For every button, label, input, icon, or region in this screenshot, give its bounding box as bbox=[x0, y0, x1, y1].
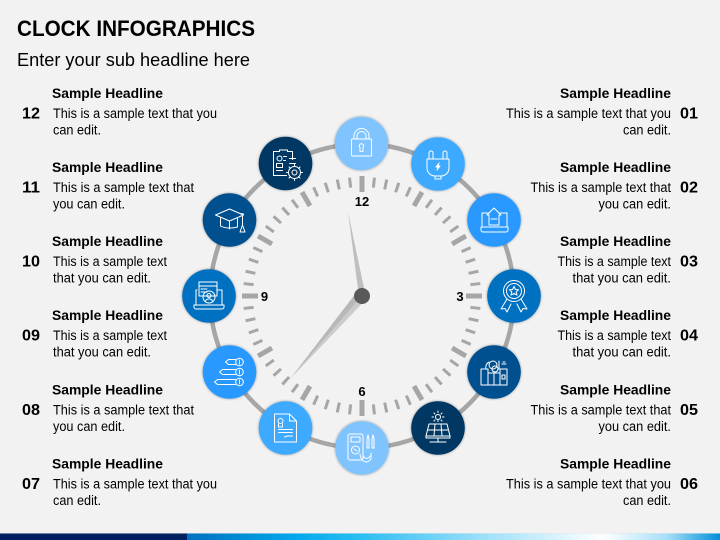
icon node 11: clipboard gear bbox=[259, 137, 312, 190]
text block: 04: 04 bbox=[680, 328, 698, 344]
icon node 8: numbered list arrows bbox=[203, 345, 256, 399]
text block: 08: This is a sample text that bbox=[53, 402, 194, 418]
text block: 02: 02 bbox=[680, 180, 698, 196]
icon node 4: factory bbox=[467, 345, 521, 399]
text block: 10: Sample Headline bbox=[52, 233, 163, 249]
text block: 02: Sample Headline bbox=[560, 159, 671, 175]
text block: 06: This is a sample text that you bbox=[506, 476, 671, 492]
text block: 04 bbox=[558, 307, 698, 360]
icon node 5: solar panel bbox=[411, 401, 465, 455]
clock minor ticks bbox=[244, 178, 480, 414]
icon node 10: graduation cap bbox=[203, 193, 256, 247]
text block: 11: 11 bbox=[22, 180, 40, 196]
icon node 1: plug bbox=[411, 137, 465, 191]
icon node 9: laptop profile bbox=[182, 269, 236, 323]
text block: 01: This is a sample text that you bbox=[506, 106, 671, 121]
text block: 03 bbox=[558, 233, 698, 286]
text block: 11: Sample Headline bbox=[52, 159, 163, 175]
clock numerals: 12 bbox=[355, 194, 369, 209]
text block: 01: Sample Headline bbox=[560, 85, 671, 101]
text block: 09: 09 bbox=[22, 328, 40, 344]
text block: 05: Sample Headline bbox=[560, 382, 671, 398]
text block: 09: Sample Headline bbox=[52, 307, 163, 323]
text block: 12: Sample Headline bbox=[52, 85, 163, 101]
text block: 09: that you can edit. bbox=[53, 344, 151, 360]
clock center bbox=[354, 288, 370, 304]
text block: 06 bbox=[506, 456, 698, 508]
text block: 05: you can edit. bbox=[598, 419, 671, 434]
clock numerals: 6 bbox=[358, 384, 366, 399]
text block: 03: This is a sample text bbox=[558, 254, 671, 269]
text block: 11: This is a sample text that bbox=[53, 180, 194, 195]
clock hour ticks bbox=[242, 176, 482, 416]
text block: 07: Sample Headline bbox=[52, 456, 163, 472]
text block: 05: This is a sample text that bbox=[530, 402, 671, 418]
text block: 12: This is a sample text that you bbox=[53, 106, 217, 121]
text block: 02: you can edit. bbox=[598, 196, 671, 212]
footer bar bbox=[0, 533, 720, 540]
text block: 03: 03 bbox=[680, 254, 698, 270]
clock numerals bbox=[261, 194, 464, 399]
text block: 08: Sample Headline bbox=[52, 382, 163, 398]
icon node 7: document bbox=[259, 401, 312, 455]
text block: 02: This is a sample text that bbox=[530, 180, 671, 195]
clock numerals: 9 bbox=[261, 289, 268, 304]
text block: 04: This is a sample text bbox=[558, 328, 671, 343]
text block: 08 bbox=[22, 382, 194, 434]
hour hand bbox=[290, 291, 366, 379]
text block: 07: This is a sample text that you bbox=[53, 476, 217, 492]
text block: 08: you can edit. bbox=[53, 419, 125, 434]
text block: 07 bbox=[22, 456, 217, 508]
text block: 10: This is a sample text bbox=[53, 254, 167, 269]
text block: 02 bbox=[530, 159, 698, 212]
text block: 11: you can edit. bbox=[53, 196, 125, 212]
text block: 09 bbox=[22, 307, 167, 360]
text block: 01: 01 bbox=[680, 106, 698, 122]
text block: 10: 10 bbox=[22, 254, 40, 270]
icon node 6: multimeter bbox=[335, 421, 389, 475]
clock ring bbox=[210, 144, 514, 448]
text block: 06: can edit. bbox=[623, 493, 671, 508]
title: CLOCK INFOGRAPHICS bbox=[17, 16, 255, 41]
text block: 03: that you can edit. bbox=[572, 270, 671, 286]
icon node 2: laptop upload bbox=[467, 193, 521, 247]
text block: 07: can edit. bbox=[53, 493, 101, 508]
icon node 12: padlock bbox=[335, 117, 388, 170]
text block: 12: 12 bbox=[22, 106, 40, 122]
text block: 10: that you can edit. bbox=[53, 270, 151, 286]
text block: 04: that you can edit. bbox=[572, 344, 671, 360]
text block: 05 bbox=[530, 382, 698, 434]
text block: 01: can edit. bbox=[623, 122, 671, 138]
text block: 07: 07 bbox=[22, 476, 40, 493]
text block: 11 bbox=[22, 159, 194, 212]
text block: 04: Sample Headline bbox=[560, 307, 671, 323]
text block: 12: can edit. bbox=[53, 122, 101, 138]
clock numerals: 3 bbox=[456, 289, 464, 304]
text block: 06: Sample Headline bbox=[560, 456, 671, 472]
subtitle: Enter your sub headline here bbox=[17, 50, 250, 70]
text block: 12 bbox=[22, 85, 217, 138]
minute hand bbox=[348, 212, 364, 289]
text block: 09: This is a sample text bbox=[53, 328, 167, 343]
text block: 08: 08 bbox=[22, 402, 40, 419]
text block: 01 bbox=[506, 85, 698, 138]
text block: 06: 06 bbox=[680, 476, 698, 493]
text block: 05: 05 bbox=[680, 402, 698, 419]
icon node 3: award ribbon bbox=[487, 269, 541, 323]
text block: 10 bbox=[22, 233, 167, 286]
text block: 03: Sample Headline bbox=[560, 233, 671, 249]
